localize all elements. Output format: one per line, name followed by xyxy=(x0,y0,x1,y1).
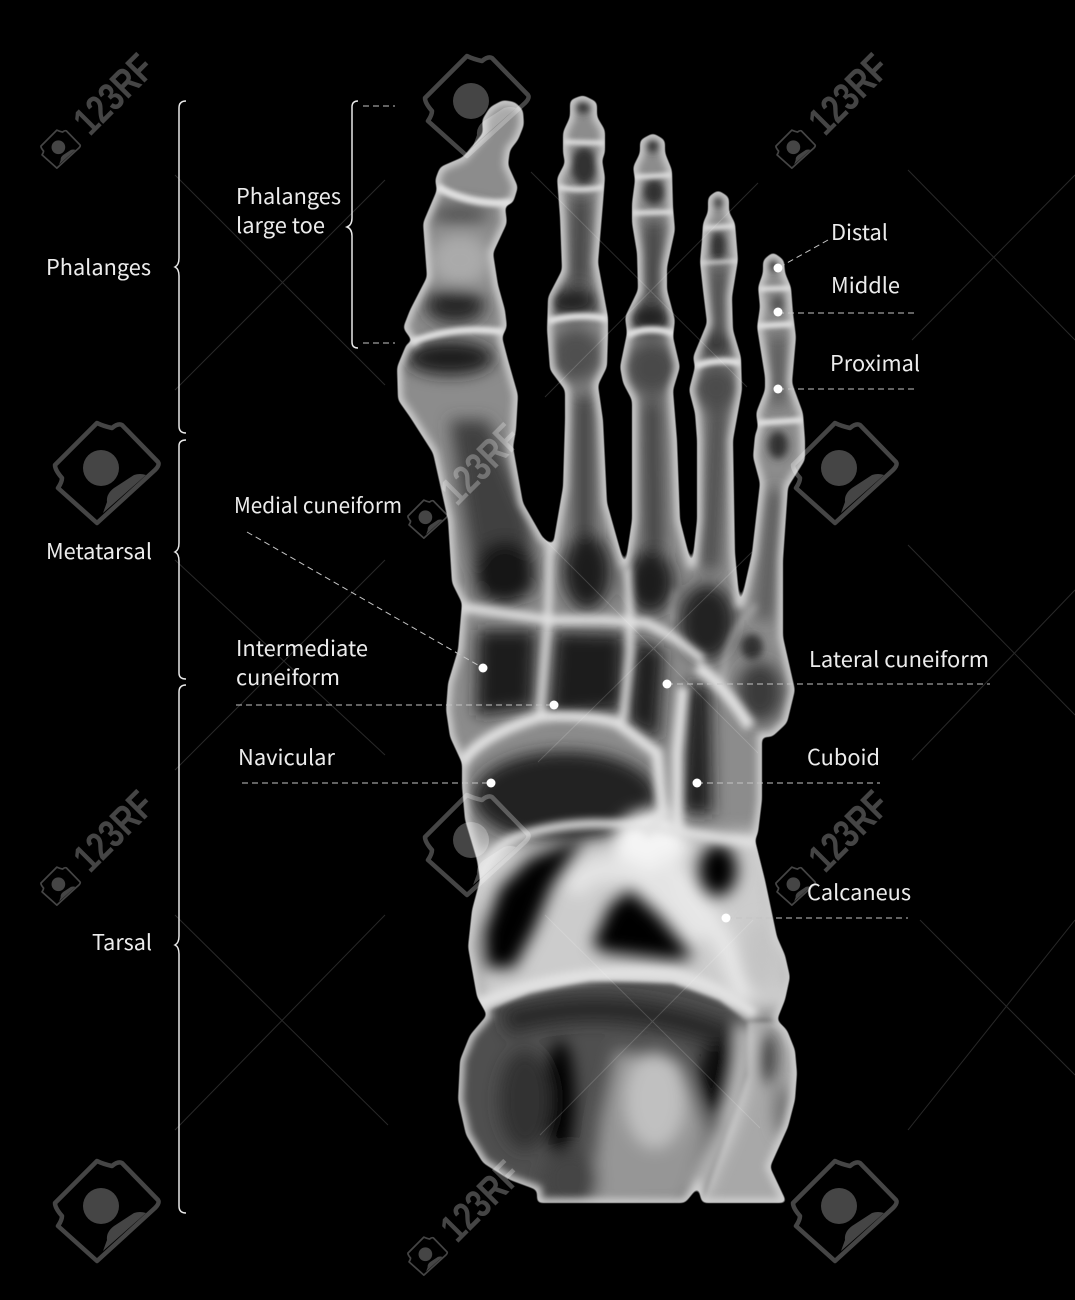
toe core shading xyxy=(571,99,788,660)
watermark wordmarks: 123RF xyxy=(800,46,898,143)
label: Cuboid: Cuboid xyxy=(807,741,880,772)
marker dots xyxy=(478,264,782,922)
bracket: Phalanges large toe xyxy=(347,101,358,348)
label: Phalanges large toe: Phalanges xyxy=(236,180,341,211)
leader: large toe bottom xyxy=(363,342,395,344)
joint lines xyxy=(411,142,803,423)
watermark wordmarks: 123RF xyxy=(432,416,530,513)
watermark wordmarks: 123RF xyxy=(800,783,898,880)
label: Lateral cuneiform: Lateral cuneiform xyxy=(809,643,989,674)
label: Intermediate cuneiform: cuneiform xyxy=(236,661,340,692)
cuneiform, navicular and cuboid core shading xyxy=(473,630,712,843)
talus dark regions xyxy=(484,836,737,968)
watermark wordmarks: 123RF xyxy=(65,46,163,143)
bracket: Phalanges xyxy=(175,101,186,433)
watermark stamps xyxy=(55,56,897,1261)
watermark wordmarks: 123RF xyxy=(65,783,163,880)
label: Navicular: Navicular xyxy=(238,741,336,772)
watermark wordmarks xyxy=(65,46,898,1250)
calcaneus and talus light area xyxy=(470,810,795,1010)
label: Calcaneus: Calcaneus xyxy=(807,876,911,907)
label: Medial cuneiform: Medial cuneiform xyxy=(234,489,402,520)
label: Middle: Middle xyxy=(831,269,900,300)
label: Proximal: Proximal xyxy=(830,347,920,378)
watermark wordmarks: 123RF xyxy=(432,1153,530,1250)
bone edge glow xyxy=(397,95,805,1203)
leader: large toe top xyxy=(363,105,395,107)
watermark crossed lines xyxy=(175,170,1075,1135)
label: Metatarsal: Metatarsal xyxy=(46,535,152,566)
watermark small logos xyxy=(41,130,815,1275)
wide joint glow xyxy=(461,545,757,1015)
ankle shading xyxy=(494,950,792,1203)
label: Intermediate cuneiform: Intermediate xyxy=(236,632,368,663)
bracket: Metatarsal xyxy=(175,440,186,679)
foot skeleton illustration xyxy=(380,80,820,1220)
label: Phalanges large toe: large toe xyxy=(236,209,325,240)
bracket: Tarsal xyxy=(175,685,186,1213)
label: Distal: Distal xyxy=(831,216,888,247)
label: Tarsal: Tarsal xyxy=(92,926,152,957)
tibia and fibula xyxy=(440,980,800,1210)
label: Phalanges: Phalanges xyxy=(46,251,151,282)
leader lines xyxy=(236,240,990,918)
bone base tone xyxy=(397,96,806,1023)
